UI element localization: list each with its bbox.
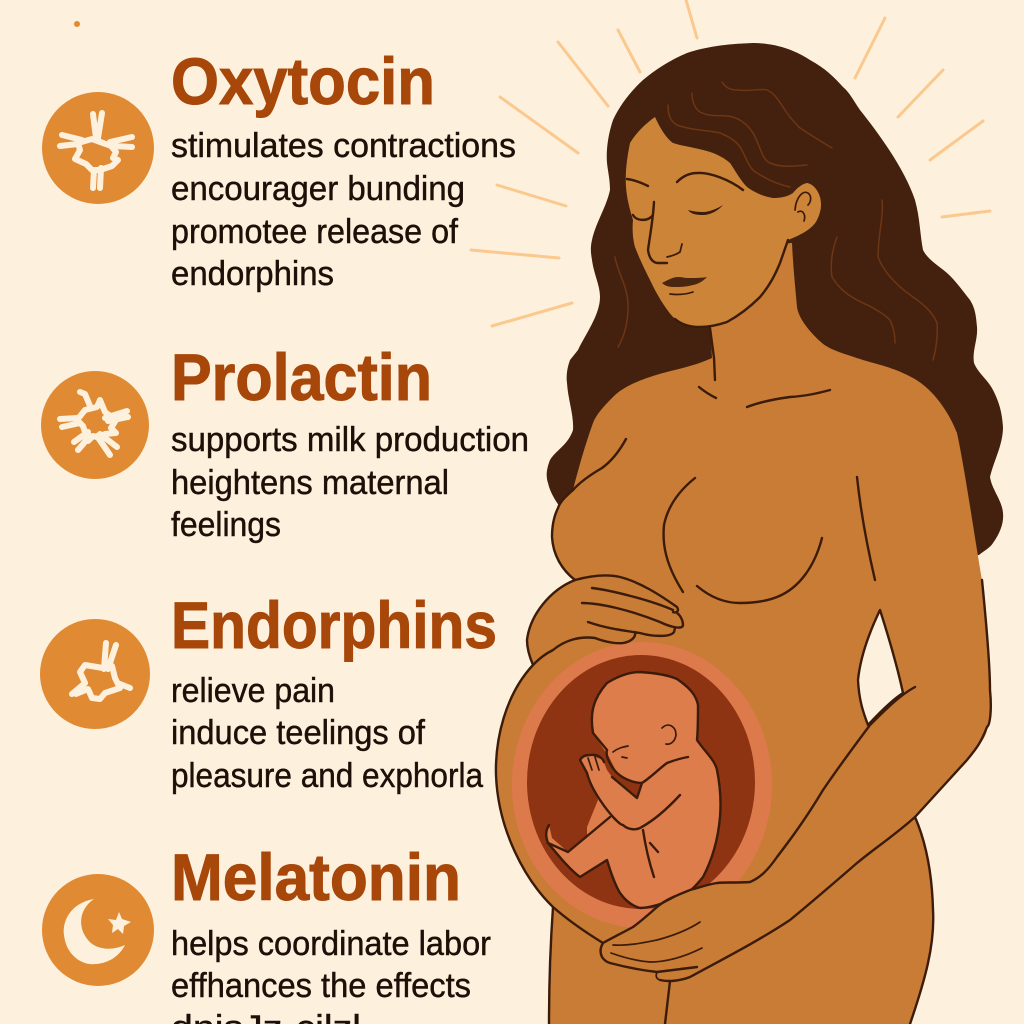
text: prolactin effects [171,421,529,544]
text: prolactin effects: feelings [171,506,281,544]
icon: crescent moon and star [42,874,154,986]
waist gap between arm and torso [858,610,903,725]
fetus [546,672,721,908]
text: prolactin effects: supports milk production [171,421,529,459]
text: oxytocin effects: promotee release of [171,213,459,251]
heading: Endorphins: Endorphins [171,588,497,662]
shoulder, breast and collarbone lines [573,328,830,603]
text: endorphins effects: pleasure and exphorla [171,757,483,795]
hair strands [615,82,937,360]
text: melatonin effects [171,925,491,1024]
body [496,243,990,1024]
illustration: pregnant woman [496,43,1003,1024]
heading: Melatonin: Melatonin [171,840,461,914]
facial features [627,173,811,327]
text: oxytocin effects [171,127,516,293]
panel: melatonin [42,840,491,1024]
radiating light rays [471,0,990,326]
text: endorphins effects: relieve pain [171,672,335,710]
belly outline [496,665,603,943]
hair [547,43,1003,560]
face [626,117,821,327]
panel: oxytocin [42,44,516,293]
text: prolactin effects: heightens maternal [171,464,449,502]
body outline lines [549,477,991,1024]
text: melatonin effects: helps coordinate labor [171,925,491,963]
text: oxytocin effects: endorphins [171,255,334,293]
text: melatonin effects: effhances the effects [171,967,471,1005]
icon: prolactin molecule [41,371,149,479]
panel: endorphins [40,588,497,795]
upper hand on belly [527,576,683,665]
text: endorphins effects: induce teelings of [171,714,426,752]
text: endorphins effects [171,672,483,795]
womb [512,642,772,928]
text: oxytocin effects: stimulates contractions [171,127,516,165]
panel: prolactin [41,340,529,544]
text: oxytocin effects: encourager bunding [171,170,465,208]
heading: Oxytocin: Oxytocin [171,44,435,118]
icon: endorphin molecule [40,619,150,729]
forearm and hand lines [601,687,915,1024]
icon: oxytocin molecule [42,92,154,204]
heading: Prolactin: Prolactin [171,340,432,414]
lower hand and forearm [603,790,915,977]
